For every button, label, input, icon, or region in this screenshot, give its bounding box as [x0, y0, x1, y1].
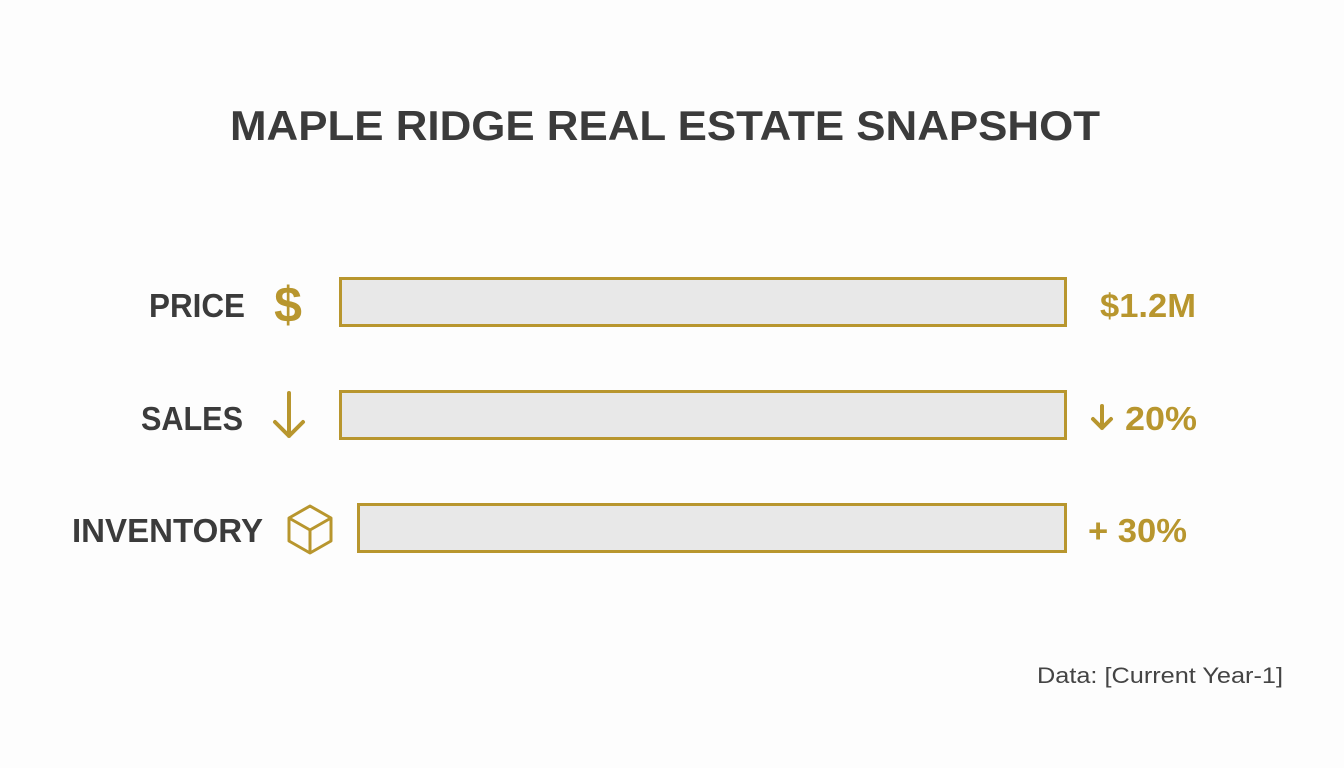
bar: sales	[340, 392, 1066, 438]
row: inventory	[72, 504, 1187, 553]
icon: dollar: $	[274, 277, 302, 333]
row: price	[149, 277, 1196, 333]
value: sales: 20%	[1125, 400, 1197, 437]
value: sales	[1093, 400, 1197, 437]
bar: inventory	[358, 504, 1066, 552]
label: inventory: INVENTORY	[72, 512, 263, 549]
row: sales	[141, 392, 1197, 438]
label: sales: SALES	[141, 400, 243, 437]
footer note: Data: [Current Year-1]	[1037, 663, 1283, 688]
value: inventory: + 30%	[1088, 512, 1187, 549]
icon: cube	[289, 506, 331, 553]
label: price: PRICE	[149, 287, 245, 324]
title: MAPLE RIDGE REAL ESTATE SNAPSHOT	[230, 102, 1100, 149]
value: price: $1.2M	[1100, 287, 1196, 324]
bar: price	[340, 278, 1066, 326]
icon: down arrow	[275, 393, 303, 436]
